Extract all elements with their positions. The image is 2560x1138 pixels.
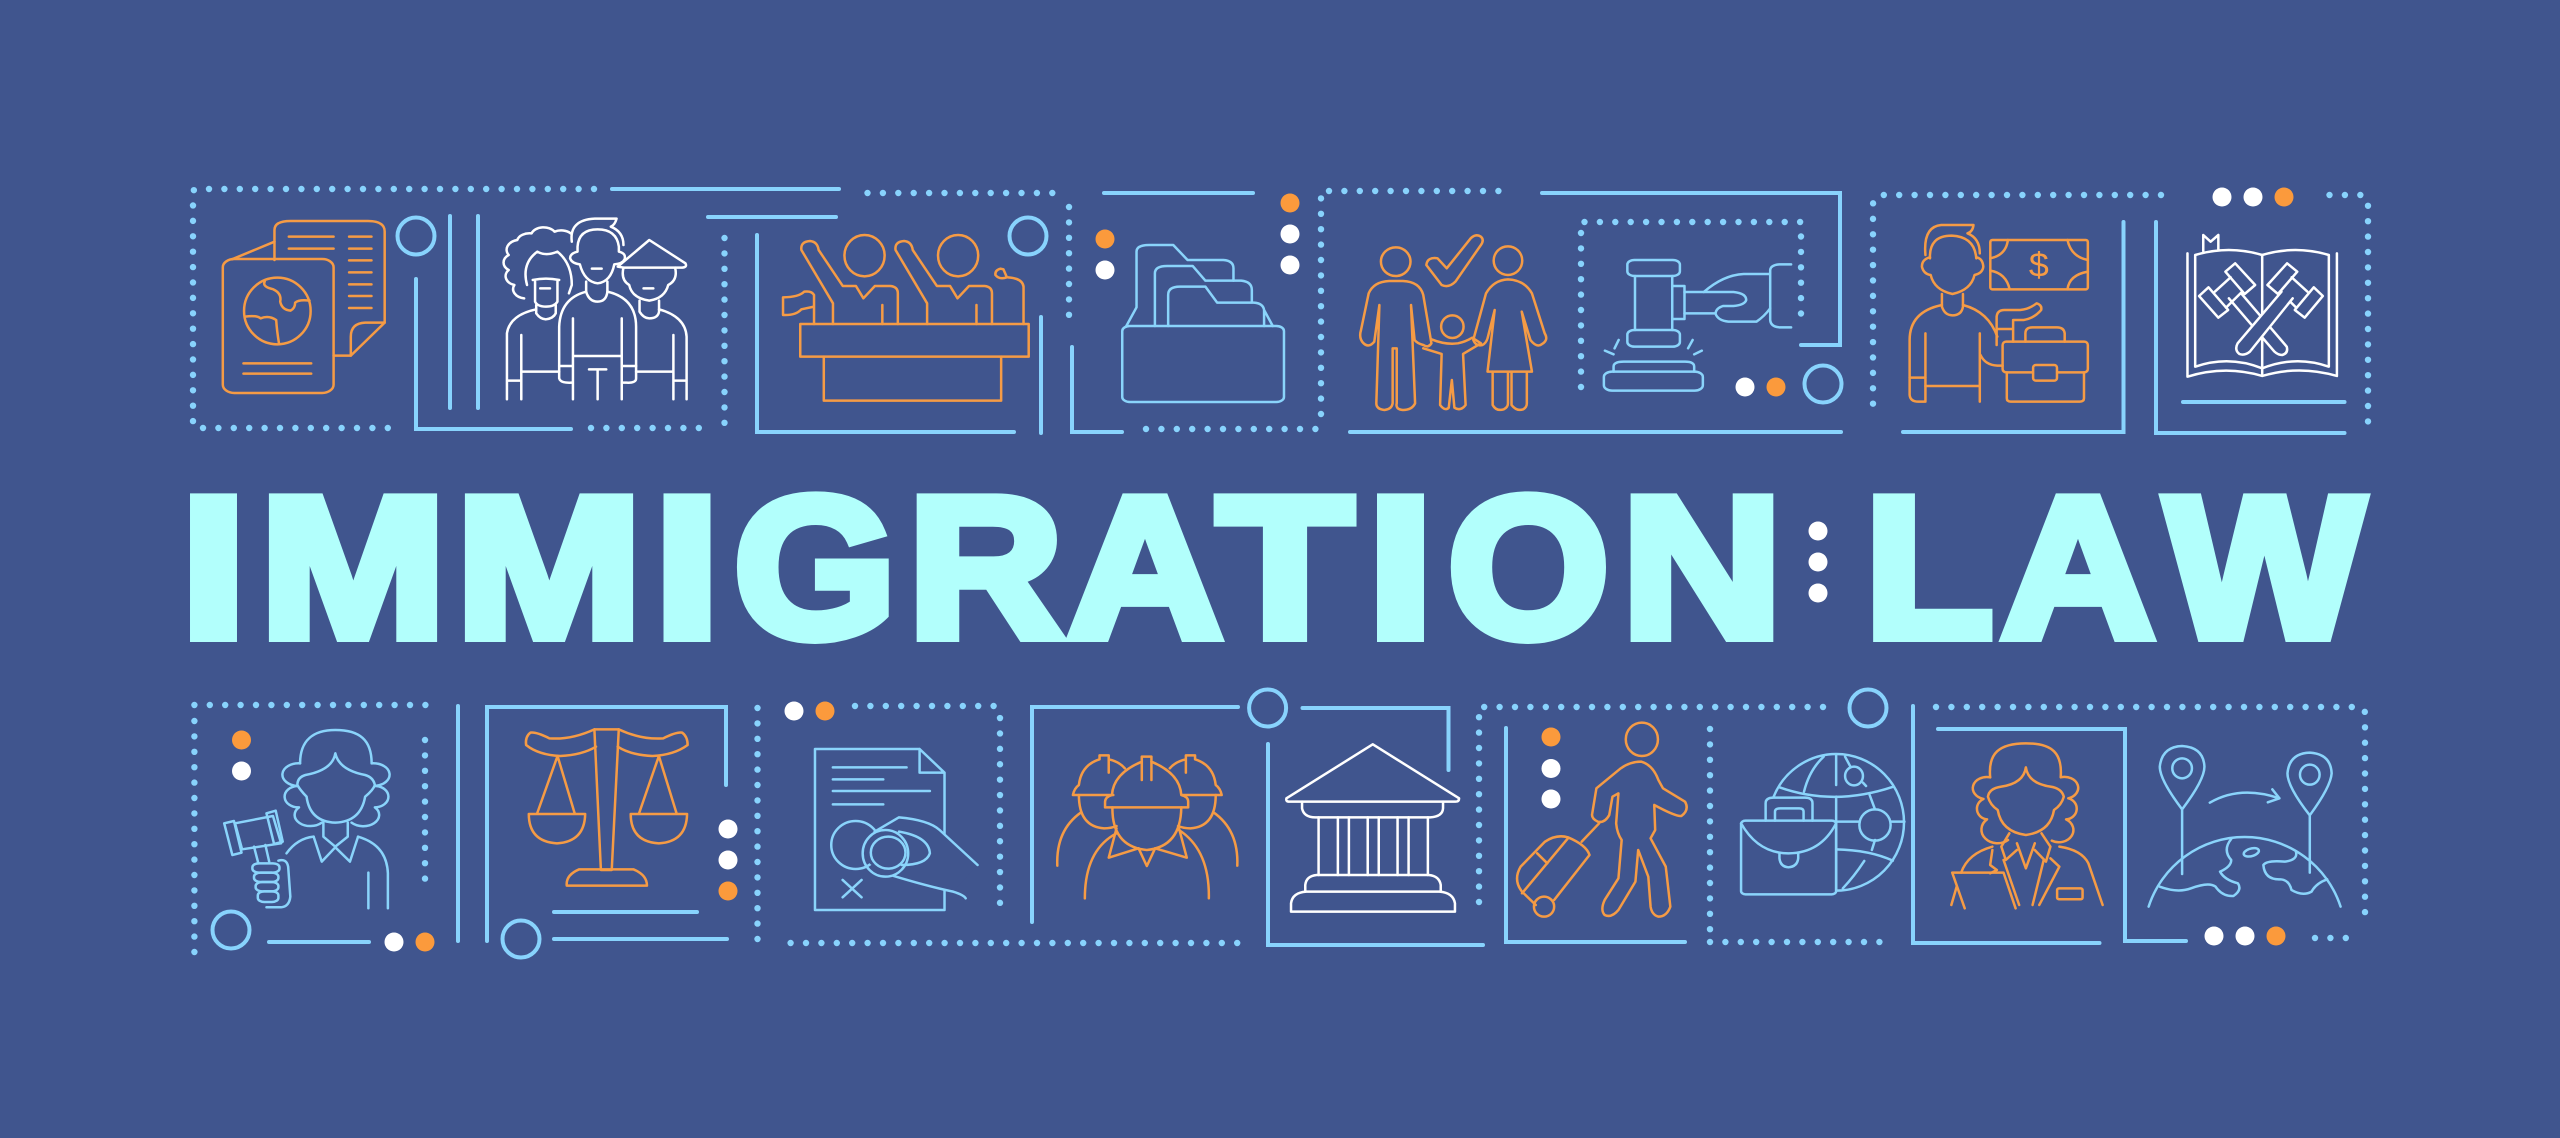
title: IMMIGRATION LAW: R <box>908 456 1063 679</box>
title: IMMIGRATION LAW: A <box>2001 455 2155 679</box>
icon: globe with briefcase <box>1741 754 1904 894</box>
icon: podium with raised hands <box>783 235 1029 401</box>
icon: location pins over globe <box>2149 746 2341 907</box>
icon: businessman with money and briefcase <box>1910 225 2088 402</box>
icon: signed document with stamp <box>815 749 978 910</box>
ring accents <box>212 218 1886 958</box>
title separator dots <box>1808 522 1828 602</box>
icon: law book with crossed gavels <box>2187 235 2337 377</box>
icon: traveler with luggage <box>1517 723 1687 917</box>
title: IMMIGRATION LAW: T <box>1217 456 1353 679</box>
title: IMMIGRATION LAW: I <box>181 456 246 679</box>
icon: hand holding gavel <box>1604 260 1791 391</box>
icon: group of immigrants <box>504 219 687 399</box>
title: IMMIGRATION LAW: A <box>1068 456 1222 679</box>
accent dots white <box>232 188 2262 952</box>
icon: scales of justice <box>526 729 688 886</box>
dotted frames <box>193 189 2368 952</box>
title: IMMIGRATION LAW: N <box>1622 456 1782 679</box>
title: IMMIGRATION LAW: G <box>734 456 896 680</box>
title: IMMIGRATION LAW: I <box>1368 456 1433 679</box>
icon: construction workers <box>1057 755 1237 898</box>
icon: judge with gavel <box>224 730 390 908</box>
accent dots orange <box>232 188 2294 952</box>
icon: family with check mark <box>1360 235 1546 410</box>
icon: courthouse <box>1286 744 1459 912</box>
icon: female lawyer with clipboard <box>1951 743 2103 908</box>
title: IMMIGRATION LAW: W <box>2165 456 2364 679</box>
icon: passport and document <box>223 221 385 393</box>
title: IMMIGRATION LAW: I <box>654 456 720 679</box>
title: IMMIGRATION LAW: M <box>260 455 446 679</box>
title: IMMIGRATION LAW: M <box>456 455 642 679</box>
line frames <box>269 189 2344 945</box>
title: IMMIGRATION LAW: L <box>1865 456 1993 679</box>
icon: file folders <box>1122 245 1284 402</box>
title: IMMIGRATION LAW <box>181 455 2364 680</box>
title: IMMIGRATION LAW: O <box>1448 457 1609 680</box>
dollar sign: $ <box>2029 246 2049 284</box>
